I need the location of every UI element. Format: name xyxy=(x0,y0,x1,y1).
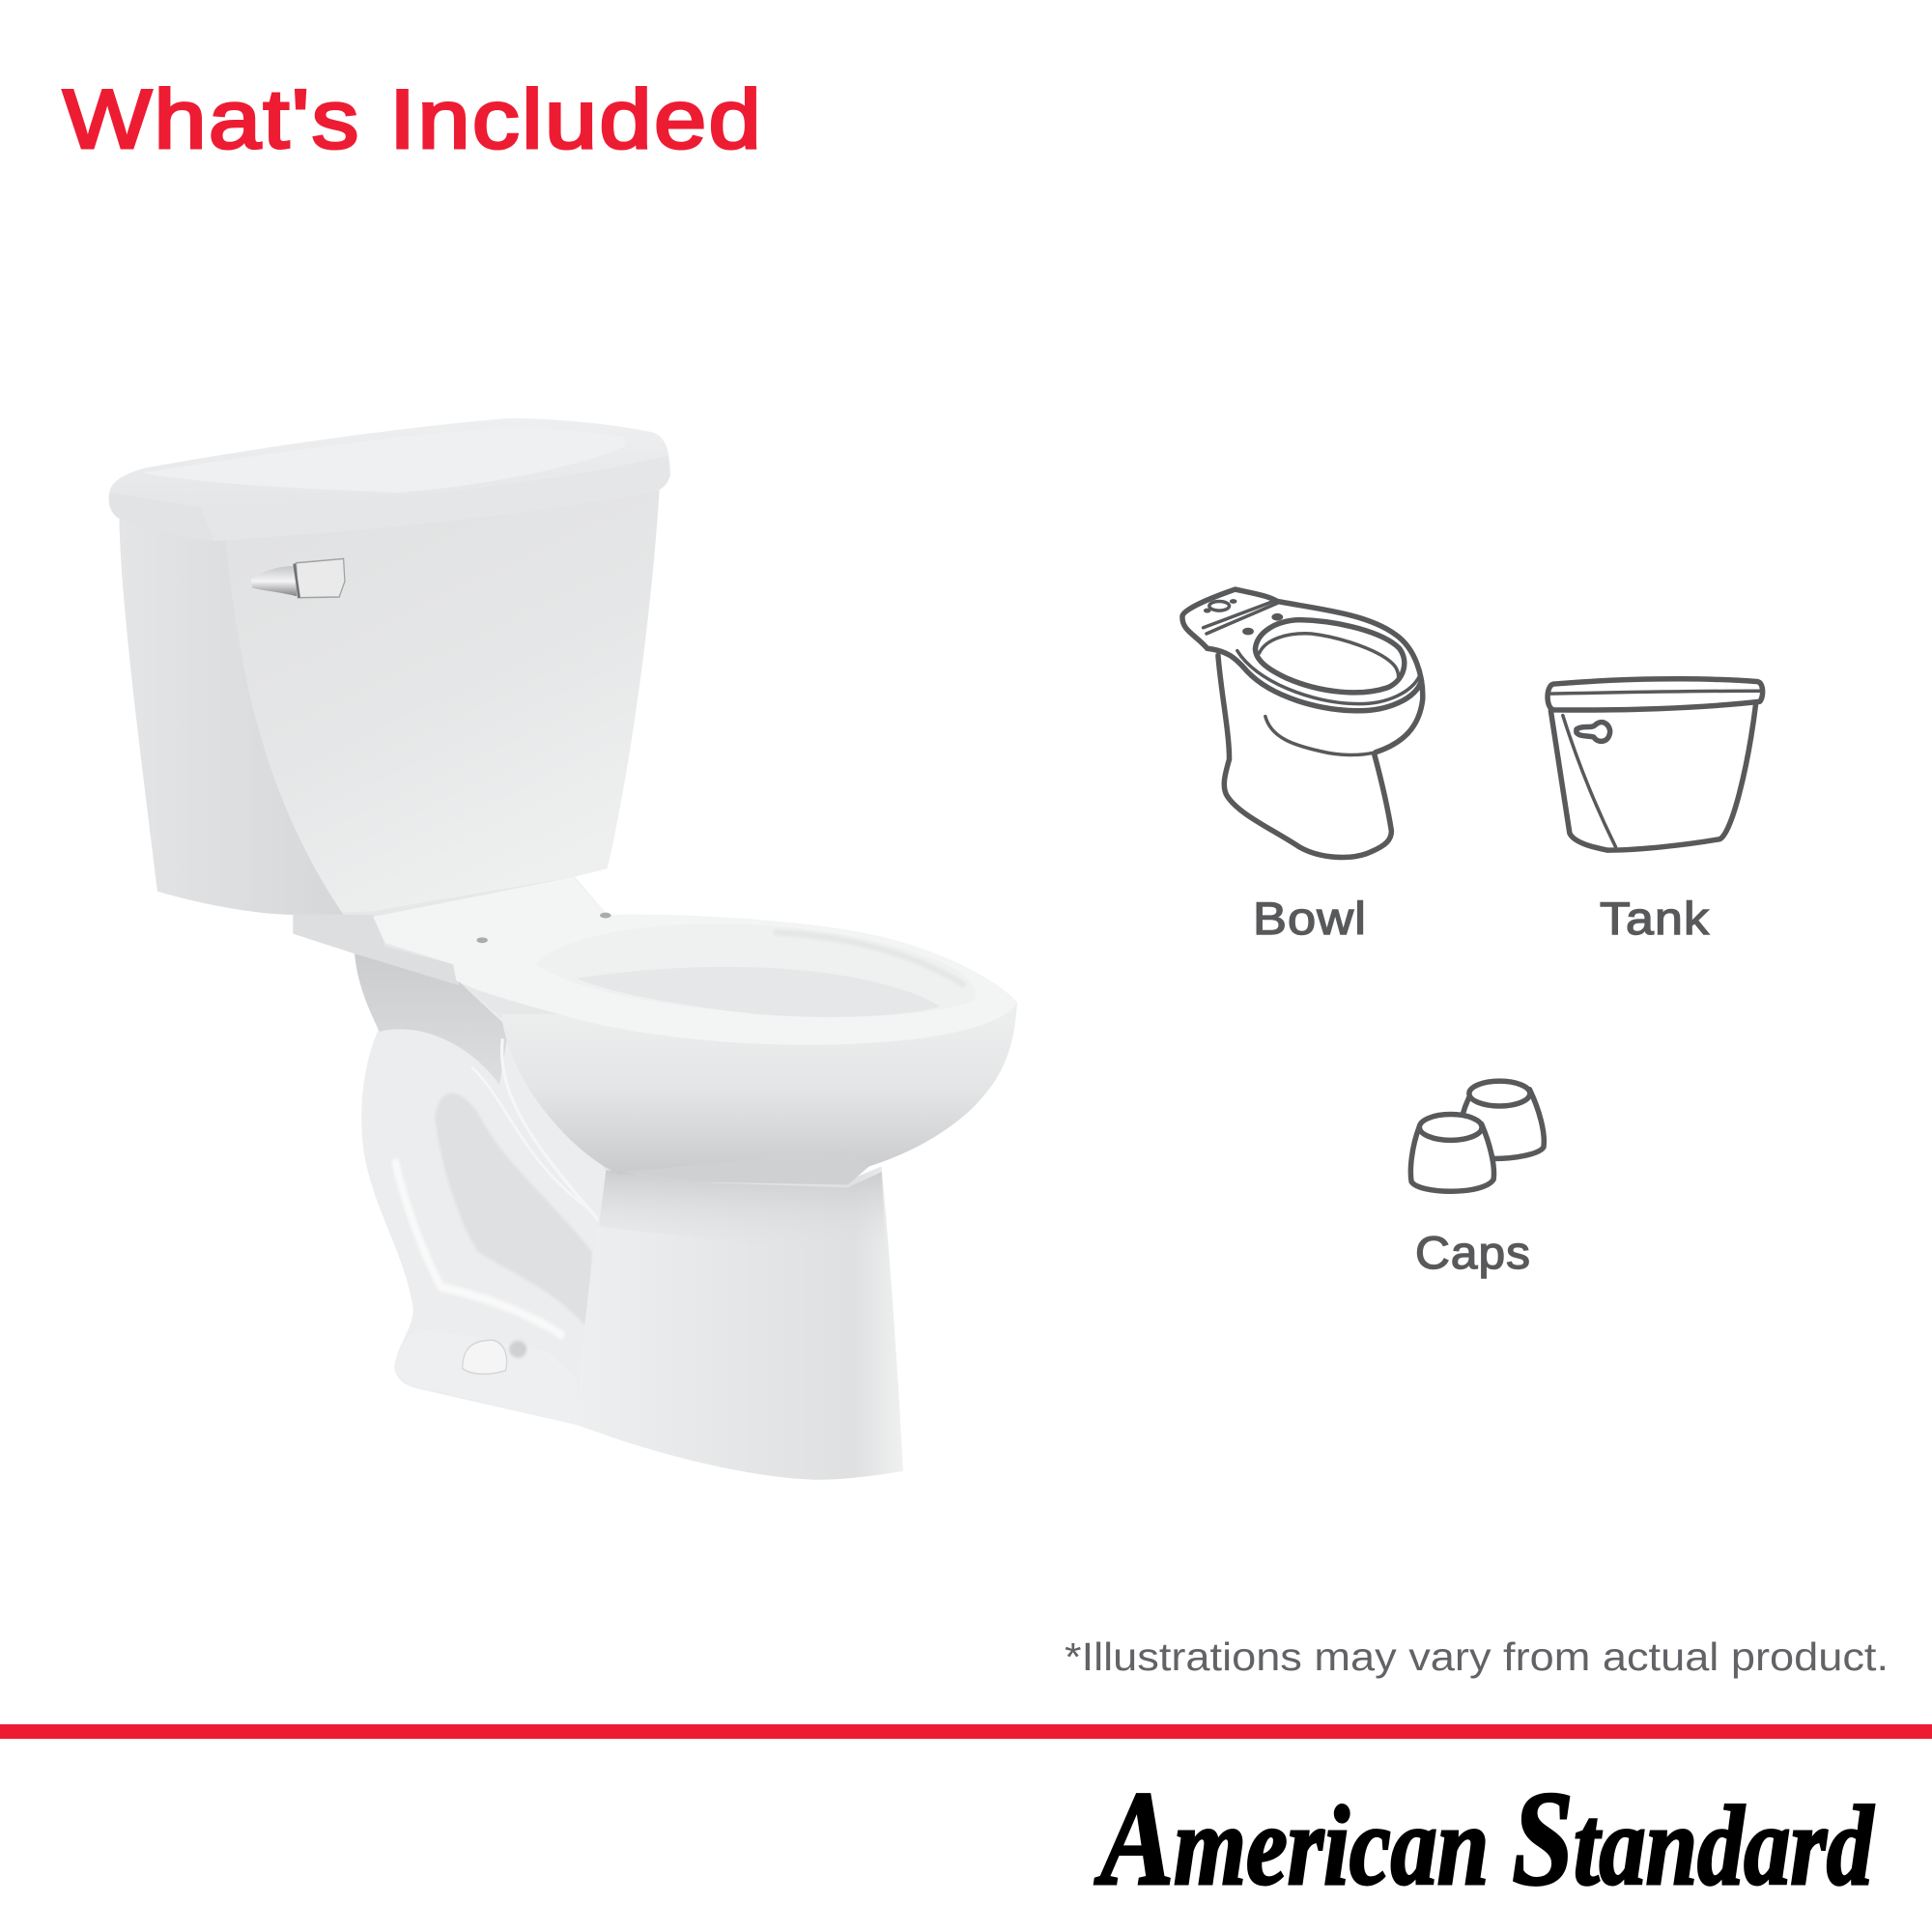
logo wordmark: American Standard xyxy=(1094,1764,1875,1914)
tank body xyxy=(119,486,660,915)
rear trapway xyxy=(355,953,608,1425)
pedestal xyxy=(578,1166,903,1480)
flush handle xyxy=(251,558,345,598)
icon: bowl xyxy=(1182,589,1423,857)
title: What's Included xyxy=(63,73,763,166)
bowl deck and rim xyxy=(293,877,1017,1045)
underlay xyxy=(293,875,608,1422)
label: caps: Caps xyxy=(1415,1227,1531,1278)
label: tank: Tank xyxy=(1600,893,1710,944)
icon: caps xyxy=(1410,1081,1544,1191)
icon: tank xyxy=(1548,679,1763,850)
bowl outer xyxy=(501,1002,1017,1184)
tank lid xyxy=(109,418,670,541)
red divider bar xyxy=(0,1724,1932,1739)
bowl base foot xyxy=(394,1329,578,1425)
footnote: *Illustrations may vary from actual product. xyxy=(1065,1634,1889,1679)
product photo: toilet xyxy=(109,418,1017,1480)
label: bowl: Bowl xyxy=(1253,893,1367,944)
